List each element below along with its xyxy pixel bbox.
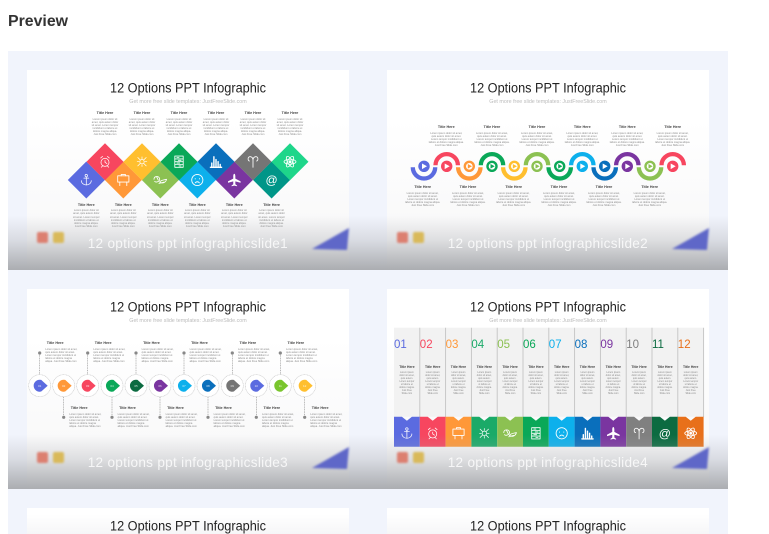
number 09: 09 bbox=[600, 339, 613, 351]
diamonds: upper row bbox=[86, 143, 308, 180]
chart: twelve numbered columns bbox=[387, 289, 709, 489]
number 12: 12 bbox=[678, 339, 691, 351]
text block: 7: Title Here bbox=[191, 341, 208, 345]
text block: column 7: Title Here bbox=[554, 365, 569, 369]
text block: column 6: Title Here bbox=[528, 365, 544, 369]
blurred badges bbox=[37, 447, 709, 469]
text block: 6: Lorem ipsum dolor sit amet, quis autem dolor sit amet. Lorem tempor incididunt ut labore et dolore magna aliqua. Just Free Slide.com bbox=[166, 413, 198, 428]
pin numbers bbox=[38, 384, 307, 388]
number 06: 06 bbox=[523, 339, 536, 351]
slide 2 title: 12 Options PPT Infographic bbox=[470, 80, 626, 96]
slide 2 title: Get more free slide templates: JustFreeSlide.com bbox=[489, 99, 607, 105]
lower arcs bbox=[413, 167, 661, 178]
text block: 8: Lorem ipsum dolor sit amet, quis autem dolor sit amet. Lorem tempor incididunt ut labore et dolore magna aliqua. Just Free Slide.com bbox=[214, 413, 246, 428]
number 04: 04 bbox=[471, 339, 484, 351]
panel: slide 2 waves bbox=[387, 70, 709, 270]
text block: 12 bbox=[310, 406, 344, 428]
number 07: 07 bbox=[549, 339, 562, 351]
text block: column 1: Lorem ipsum dolor sit amet, quis autem. Lorem tempor ut labore et dolore magna. Just Free Slide.com bbox=[399, 371, 415, 395]
text block: 1: Lorem ipsum dolor sit amet, quis autem dolor sit amet. Lorem tempor incididunt ut labore et dolore magna aliqua. Just Free Slide.com bbox=[45, 348, 77, 363]
text block: lower 6: Lorem ipsum dolor sit amet, quis autem dolor sit amet. Lorem tempor incididunt ut labore et dolore magna aliqua. Just Free Slide.com bbox=[258, 209, 285, 228]
text block: column 2: Lorem ipsum dolor sit amet, quis autem. Lorem tempor ut labore et dolore magna. Just Free Slide.com bbox=[425, 371, 440, 395]
slide 4 title: 12 Options PPT Infographic bbox=[470, 300, 626, 314]
pin numbers: 11 bbox=[279, 384, 282, 388]
text block: 2: Title Here bbox=[71, 406, 88, 410]
slide 4 title: Get more free slide templates: JustFreeSlide.com bbox=[489, 318, 607, 324]
text block: column 5: Title Here bbox=[502, 365, 518, 369]
upper arcs bbox=[436, 154, 684, 165]
panel: slide 5 (cropped) bbox=[27, 508, 349, 534]
text block: lower 6: Title Here bbox=[263, 203, 280, 207]
text block: lower 2 bbox=[450, 185, 486, 207]
text block: 4: Lorem ipsum dolor sit amet, quis autem dolor sit amet. Lorem tempor incididunt ut labore et dolore magna aliqua. Just Free Slide.com bbox=[118, 413, 150, 428]
text block: lower 5: Lorem ipsum dolor sit amet, quis autem dolor sit amet. Lorem tempor incididunt ut labore et dolore magna aliqua. Just Free Slide.com bbox=[586, 192, 622, 207]
text block: upper 3: Title Here bbox=[171, 111, 187, 115]
play circles bbox=[418, 161, 678, 172]
coloured tabs with notches bbox=[394, 417, 704, 447]
number 03: 03 bbox=[446, 339, 458, 351]
tab icons bbox=[402, 426, 697, 440]
blurred badges bbox=[37, 228, 709, 250]
text block: column 3: Lorem ipsum dolor sit amet, quis autem. Lorem tempor ut labore et dolore magna. Just Free Slide.com bbox=[451, 371, 466, 395]
text block: 9: Title Here bbox=[240, 341, 256, 345]
tab icons: @ bbox=[659, 426, 671, 440]
text block: lower 6: Title Here bbox=[641, 185, 658, 189]
text block: upper 3 bbox=[519, 125, 555, 147]
text block: upper 5 bbox=[610, 125, 645, 147]
text block: lower 3: Title Here bbox=[152, 203, 169, 207]
text block: 5: Lorem ipsum dolor sit amet, quis autem dolor sit amet. Lorem tempor incididunt ut labore et dolore magna aliqua. Just Free Slide.com bbox=[142, 348, 174, 363]
text block: upper 5: Title Here bbox=[245, 111, 261, 115]
text block: 8 bbox=[214, 406, 248, 428]
text block: 6: Title Here bbox=[167, 406, 184, 410]
text block: lower 2: Lorem ipsum dolor sit amet, quis autem dolor sit amet. Lorem tempor incididunt ut labore et dolore magna aliqua. Just Free Slide.com bbox=[450, 192, 486, 207]
slide 1 title: 12 Options PPT Infographic bbox=[110, 80, 266, 96]
text block: column 8: Lorem ipsum dolor sit amet, quis autem. Lorem tempor ut labore et dolore magna. Just Free Slide.com bbox=[580, 371, 595, 395]
text block: upper 6: Title Here bbox=[282, 111, 298, 115]
text block: column 11: Title Here bbox=[657, 365, 673, 369]
text block: lower 1: Lorem ipsum dolor sit amet, quis autem dolor sit amet. Lorem tempor incididunt ut labore et dolore magna aliqua. Just Free Slide.com bbox=[73, 209, 100, 228]
text block: upper 3: Title Here bbox=[529, 125, 545, 129]
text block: column 11: Lorem ipsum dolor sit amet, quis autem. Lorem tempor ut labore et dolore magna. Just Free Slide.com bbox=[657, 371, 673, 395]
rings bbox=[29, 375, 316, 397]
diamonds: lower row bbox=[68, 162, 290, 198]
text block: column 3: Title Here bbox=[451, 365, 466, 369]
number 01: 01 bbox=[394, 339, 407, 351]
pin numbers: 08 bbox=[206, 384, 210, 388]
text block: upper 3: Lorem ipsum dolor sit amet, quis autem dolor sit amet. Lorem tempor incididunt ut labore et dolore magna aliqua. Just Free Slide.com bbox=[519, 132, 555, 147]
slide 1 title: Get more free slide templates: JustFreeSlide.com bbox=[129, 99, 247, 105]
text block: lower 5: Title Here bbox=[226, 203, 243, 207]
text block: lower 3: Lorem ipsum dolor sit amet, quis autem dolor sit amet. Lorem tempor incididunt ut labore et dolore magna aliqua. Just Free Slide.com bbox=[496, 192, 531, 207]
text block: upper 2 bbox=[474, 125, 510, 147]
text block: lower 5: Lorem ipsum dolor sit amet, quis autem dolor sit amet. Lorem tempor incididunt ut labore et dolore magna aliqua. Just Free Slide.com bbox=[221, 209, 248, 228]
text block: upper 2: Lorem ipsum dolor sit amet, quis autem dolor sit amet. Lorem tempor incididunt ut labore et dolore magna aliqua. Just Free Slide.com bbox=[474, 132, 510, 147]
caption: slide 1: 12 options ppt infographicslide1 bbox=[88, 236, 288, 251]
text block: column 9: Title Here bbox=[606, 365, 621, 369]
text block: column 12: Title Here bbox=[683, 365, 698, 369]
text block: upper 6: Lorem ipsum dolor sit amet, quis autem dolor sit amet. Lorem tempor incididunt ut labore et dolore magna aliqua. Just Free Slide.com bbox=[277, 118, 303, 136]
text block: lower 1 bbox=[405, 185, 440, 207]
text block: upper 3: Lorem ipsum dolor sit amet, quis autem dolor sit amet. Lorem tempor incididunt ut labore et dolore magna aliqua. Just Free Slide.com bbox=[166, 118, 192, 136]
text block: lower 2: Lorem ipsum dolor sit amet, quis autem dolor sit amet. Lorem tempor incididunt ut labore et dolore magna aliqua. Just Free Slide.com bbox=[110, 209, 137, 228]
text block: upper 1: Lorem ipsum dolor sit amet, quis autem dolor sit amet. Lorem tempor incididunt ut labore et dolore magna aliqua. Just Free Slide.com bbox=[92, 118, 118, 136]
text block: 10: Title Here bbox=[264, 406, 280, 410]
text block: upper 4: Lorem ipsum dolor sit amet, quis autem dolor sit amet. Lorem tempor incididunt ut labore et dolore magna aliqua. Just Free Slide.com bbox=[565, 132, 600, 147]
pin numbers: 01 bbox=[38, 384, 42, 388]
text block: column 1: Title Here bbox=[399, 365, 415, 369]
text block: upper 2: Lorem ipsum dolor sit amet, quis autem dolor sit amet. Lorem tempor incididunt ut labore et dolore magna aliqua. Just Free Slide.com bbox=[129, 118, 155, 136]
pin numbers: 10 bbox=[255, 384, 258, 388]
panel: slide 6 (cropped) bbox=[387, 508, 709, 534]
text block: lower 4: Title Here bbox=[189, 203, 206, 207]
text block: upper 5: Title Here bbox=[619, 125, 636, 129]
text block: column 7: Lorem ipsum dolor sit amet, quis autem. Lorem tempor ut labore et dolore magna. Just Free Slide.com bbox=[554, 371, 569, 395]
slide 5 title: 12 Options PPT Infographic bbox=[110, 518, 266, 534]
text block: 7: Lorem ipsum dolor sit amet, quis autem dolor sit amet. Lorem tempor incididunt ut labore et dolore magna aliqua. Just Free Slide.com bbox=[190, 348, 222, 363]
text block: lower 6 bbox=[632, 185, 667, 207]
slide 4 title bbox=[387, 289, 709, 329]
text block: lower 2: Title Here bbox=[460, 185, 476, 189]
text block: upper 4: Lorem ipsum dolor sit amet, quis autem dolor sit amet. Lorem tempor incididunt ut labore et dolore magna aliqua. Just Free Slide.com bbox=[203, 118, 229, 136]
text block: 12: Lorem ipsum dolor sit amet, quis autem dolor sit amet. Lorem tempor incididunt ut labore et dolore magna aliqua. Just Free Slide.com bbox=[310, 413, 342, 428]
panel: slide 3 timeline bbox=[27, 289, 349, 489]
text block: 2: Lorem ipsum dolor sit amet, quis autem dolor sit amet. Lorem tempor incididunt ut labore et dolore magna aliqua. Just Free Slide.com bbox=[69, 413, 101, 428]
caption: slide 2: 12 options ppt infographicslide2 bbox=[448, 236, 648, 251]
text block: lower 4: Lorem ipsum dolor sit amet, quis autem dolor sit amet. Lorem tempor incididunt ut labore et dolore magna aliqua. Just Free Slide.com bbox=[184, 209, 211, 228]
text block: lower 3: Lorem ipsum dolor sit amet, quis autem dolor sit amet. Lorem tempor incididunt ut labore et dolore magna aliqua. Just Free Slide.com bbox=[147, 209, 174, 228]
chart: diamond row with icons bbox=[68, 143, 308, 198]
text block: lower 4 bbox=[541, 185, 577, 207]
text block: lower 5: Title Here bbox=[596, 185, 612, 189]
text block: upper 6: Lorem ipsum dolor sit amet, quis autem dolor sit amet. Lorem tempor incididunt ut labore et dolore magna aliqua. Just Free Slide.com bbox=[655, 132, 690, 147]
pin numbers: 07 bbox=[182, 384, 186, 388]
text block: 2 bbox=[69, 406, 102, 428]
pin numbers: 09 bbox=[231, 384, 234, 388]
panel: slide 4 columns bbox=[387, 289, 709, 489]
text block: upper 6 bbox=[655, 125, 690, 147]
text block: column 12: Lorem ipsum dolor sit amet, quis autem. Lorem tempor ut labore et dolore magna. Just Free Slide.com bbox=[683, 371, 698, 395]
text block: upper 5: Lorem ipsum dolor sit amet, quis autem dolor sit amet. Lorem tempor incididunt ut labore et dolore magna aliqua. Just Free Slide.com bbox=[240, 118, 266, 136]
text block: lower 3 bbox=[496, 185, 531, 207]
text block: lower 6: Lorem ipsum dolor sit amet, quis autem dolor sit amet. Lorem tempor incididunt ut labore et dolore magna aliqua. Just Free Slide.com bbox=[632, 192, 667, 207]
text block: lower 1: Title Here bbox=[78, 203, 95, 207]
text block: lower 1: Title Here bbox=[414, 185, 431, 189]
column backgrounds bbox=[394, 328, 704, 417]
text block: upper 1 bbox=[428, 125, 464, 147]
text block: upper 5: Lorem ipsum dolor sit amet, quis autem dolor sit amet. Lorem tempor incididunt ut labore et dolore magna aliqua. Just Free Slide.com bbox=[610, 132, 645, 147]
text block: upper 1: Title Here bbox=[438, 125, 455, 129]
chart: numbered timeline bbox=[28, 351, 316, 419]
text block: 9: Lorem ipsum dolor sit amet, quis autem dolor sit amet. Lorem tempor incididunt ut labore et dolore magna aliqua. Just Free Slide.com bbox=[238, 348, 270, 363]
text block: 12: Title Here bbox=[312, 406, 329, 410]
text block: 4: Title Here bbox=[119, 406, 136, 410]
text block: upper 4 bbox=[564, 125, 600, 147]
text block: 1 bbox=[45, 341, 78, 363]
text block: lower 4: Lorem ipsum dolor sit amet, quis autem dolor sit amet. Lorem tempor incididunt ut labore et dolore magna aliqua. Just Free Slide.com bbox=[541, 192, 577, 207]
pin numbers: 06 bbox=[158, 384, 162, 388]
text block: column 4: Title Here bbox=[477, 365, 492, 369]
text block: column 2: Title Here bbox=[425, 365, 440, 369]
text block: 8: Title Here bbox=[215, 406, 232, 410]
caption: slide 3: 12 options ppt infographicslide3 bbox=[88, 455, 288, 470]
slide 3 title: Get more free slide templates: JustFreeSlide.com bbox=[129, 318, 247, 324]
chart: wave of arcs and play circles bbox=[410, 152, 686, 181]
text block: upper 6: Title Here bbox=[664, 125, 681, 129]
number 02: 02 bbox=[420, 339, 433, 351]
text block: 10 bbox=[262, 406, 296, 428]
text block: upper 2: Title Here bbox=[484, 125, 500, 129]
text block: 3 bbox=[93, 341, 126, 363]
pin numbers: 04 bbox=[110, 384, 114, 388]
number 11: 11 bbox=[652, 339, 664, 351]
text block: column 10: Title Here bbox=[631, 365, 647, 369]
number 05: 05 bbox=[497, 339, 510, 351]
text block: 1: Title Here bbox=[47, 341, 64, 345]
icons on diamonds bbox=[81, 155, 296, 187]
text block: upper 1: Title Here bbox=[97, 111, 113, 115]
text block: column 9: Lorem ipsum dolor sit amet, quis autem. Lorem tempor ut labore et dolore magna. Just Free Slide.com bbox=[606, 371, 621, 395]
column separators bbox=[420, 328, 704, 417]
panel: slide 1 diamonds bbox=[27, 70, 349, 270]
text block: lower 1: Lorem ipsum dolor sit amet, quis autem dolor sit amet. Lorem tempor incididunt ut labore et dolore magna aliqua. Just Free Slide.com bbox=[405, 192, 440, 207]
slide 3 title: 12 Options PPT Infographic bbox=[110, 300, 266, 314]
text block: lower 2: Title Here bbox=[115, 203, 132, 207]
slide 1 title bbox=[110, 80, 266, 105]
text block: 3: Title Here bbox=[95, 341, 112, 345]
text block: column 4: Lorem ipsum dolor sit amet, quis autem. Lorem tempor ut labore et dolore magna. Just Free Slide.com bbox=[477, 371, 492, 395]
text block: 11: Lorem ipsum dolor sit amet, quis autem dolor sit amet. Lorem tempor incididunt ut labore et dolore magna aliqua. Just Free Slide.com bbox=[286, 348, 318, 363]
text block: lower 3: Title Here bbox=[505, 185, 522, 189]
text block: 5: Title Here bbox=[143, 341, 160, 345]
text block: 10: Lorem ipsum dolor sit amet, quis autem dolor sit amet. Lorem tempor incididunt ut labore et dolore magna aliqua. Just Free Slide.com bbox=[262, 413, 294, 428]
text block: column 8: Title Here bbox=[580, 365, 595, 369]
number 08: 08 bbox=[575, 339, 587, 351]
text block: column 6: Lorem ipsum dolor sit amet, quis autem. Lorem tempor ut labore et dolore magna. Just Free Slide.com bbox=[528, 371, 544, 395]
caption: slide 4: 12 options ppt infographicslide4 bbox=[448, 455, 648, 470]
text block: upper 1: Lorem ipsum dolor sit amet, quis autem dolor sit amet. Lorem tempor incididunt ut labore et dolore magna aliqua. Just Free Slide.com bbox=[429, 132, 464, 147]
pin numbers: 12 bbox=[303, 384, 307, 388]
icons on diamonds: @ bbox=[266, 173, 278, 187]
text block: upper 2: Title Here bbox=[134, 111, 150, 115]
text block: column 5: Lorem ipsum dolor sit amet, quis autem. Lorem tempor ut labore et dolore magna. Just Free Slide.com bbox=[502, 371, 518, 395]
text block: 11: Title Here bbox=[288, 341, 304, 345]
caption overlay: row 1 bbox=[8, 216, 728, 270]
pin numbers: 05 bbox=[134, 384, 138, 388]
coloured pins bbox=[34, 380, 313, 392]
pin numbers: 03 bbox=[86, 384, 90, 388]
connector stems and dots bbox=[38, 351, 306, 419]
pin numbers: 02 bbox=[62, 384, 66, 388]
text block: column 10: Lorem ipsum dolor sit amet, quis autem. Lorem tempor ut labore et dolore magna. Just Free Slide.com bbox=[631, 371, 647, 395]
slide 2 title bbox=[470, 80, 626, 105]
text block: 3: Lorem ipsum dolor sit amet, quis autem dolor sit amet. Lorem tempor incididunt ut labore et dolore magna aliqua. Just Free Slide.com bbox=[93, 348, 125, 363]
slide 6 title: 12 Options PPT Infographic bbox=[470, 518, 626, 534]
text block: upper 4: Title Here bbox=[574, 125, 591, 129]
slide 3 title bbox=[110, 300, 266, 324]
text block: lower 4: Title Here bbox=[551, 185, 567, 189]
caption overlay: row 2 bbox=[8, 435, 728, 489]
text block: lower 5 bbox=[586, 185, 622, 207]
number 10: 10 bbox=[626, 339, 639, 351]
text block: upper 4: Title Here bbox=[208, 111, 224, 115]
heading: Preview: Preview bbox=[8, 13, 69, 30]
